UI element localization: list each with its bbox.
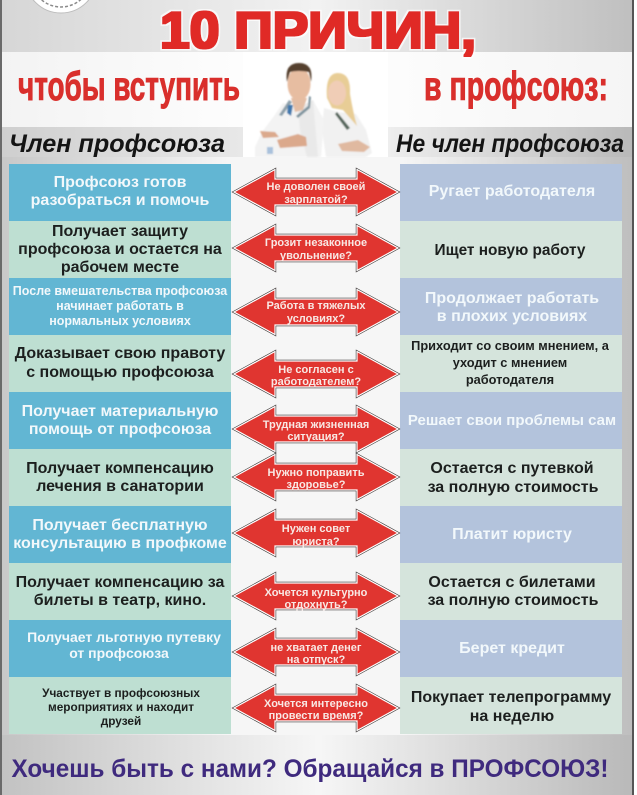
right row 2 bbox=[400, 221, 622, 278]
right row 10: Покупает телепрограмму bbox=[411, 689, 611, 706]
left row 4: Доказывает свою правоту bbox=[15, 345, 225, 362]
arrow 3: Работа в тяжелых bbox=[266, 300, 366, 312]
left row 8 bbox=[9, 563, 231, 620]
left row 1: разобраться и помочь bbox=[31, 192, 210, 209]
arrow 2 bbox=[234, 226, 398, 270]
left row 4 bbox=[9, 335, 231, 392]
left row 10: мероприятиях и находит bbox=[48, 700, 194, 714]
left row 5: помощь от профсоюза bbox=[29, 421, 211, 438]
right row 10: на неделю bbox=[470, 708, 555, 725]
footer call to action: Хочешь быть с нами? Обращайся в ПРОФСОЮЗ! bbox=[12, 755, 608, 783]
arrow 5: ситуация? bbox=[287, 431, 345, 443]
man hands bbox=[260, 131, 279, 138]
arrow 7 bbox=[234, 510, 398, 556]
right row 5: Решает свои проблемы сам bbox=[408, 412, 616, 429]
right row 4: Приходит со своим мнением, а bbox=[411, 338, 610, 353]
arrow 5 bbox=[234, 406, 398, 452]
right row 8: Остается с билетами bbox=[428, 574, 596, 591]
arrow 8: Хочется культурно bbox=[265, 587, 368, 599]
arrow 2: Грозит незаконное bbox=[265, 237, 367, 249]
arrow 3: условиях? bbox=[287, 313, 345, 325]
right row 4 bbox=[400, 335, 622, 392]
arrow 1: зарплатой? bbox=[284, 194, 348, 206]
left row 3: нормальных условиях bbox=[49, 314, 191, 328]
left row 8: билеты в театр, кино. bbox=[34, 592, 206, 609]
logo fragment bbox=[25, 0, 97, 13]
arrow 2: увольнение? bbox=[280, 250, 352, 262]
right row 6: за полную стоимость bbox=[428, 479, 599, 496]
left row 3: После вмешательства профсоюза bbox=[13, 284, 228, 298]
right row 10 bbox=[400, 677, 622, 734]
arrow 4 bbox=[234, 352, 398, 396]
arrow 6 bbox=[234, 454, 398, 500]
left row 6: Получает компенсацию bbox=[26, 460, 214, 477]
right row 7: Платит юристу bbox=[452, 526, 572, 543]
right row 6: Остается с путевкой bbox=[430, 460, 594, 477]
arrow 5: Трудная жизненная bbox=[263, 419, 369, 431]
woman hair and face bbox=[327, 73, 357, 126]
right row 9 bbox=[400, 620, 622, 677]
arrow 1 bbox=[234, 170, 398, 214]
man head bbox=[288, 68, 310, 100]
arrow 6: Нужно поправить bbox=[268, 467, 365, 479]
right row 4: работодателя bbox=[466, 372, 554, 387]
left column: member bbox=[9, 164, 231, 734]
woman coat bbox=[322, 108, 372, 157]
photo: two doctors bbox=[243, 52, 388, 157]
left row 8: Получает компенсацию за bbox=[16, 574, 224, 591]
left row 6 bbox=[9, 449, 231, 506]
left row 4: с помощью профсоюза bbox=[26, 364, 214, 381]
arrow 8: отдохнуть? bbox=[284, 599, 348, 611]
arrow 6: здоровье? bbox=[287, 479, 346, 491]
left row 6: лечения в санатории bbox=[36, 478, 204, 495]
arrow 10 bbox=[234, 686, 398, 730]
right row 7 bbox=[400, 506, 622, 563]
right row 5 bbox=[400, 392, 622, 449]
right row 9: Берет кредит bbox=[459, 640, 565, 657]
left row 1: Профсоюз готов bbox=[54, 174, 187, 191]
left row 2: профсоюза и остается на bbox=[18, 241, 222, 258]
right row 8 bbox=[400, 563, 622, 620]
left row 7: консультацию в профкоме bbox=[13, 535, 227, 552]
left row 10 bbox=[9, 677, 231, 734]
left row 3: начинает работать в bbox=[56, 299, 184, 313]
right row 3: в плохих условиях bbox=[437, 308, 587, 325]
left row 3 bbox=[9, 278, 231, 335]
right row 8: за полную стоимость bbox=[428, 592, 599, 609]
left row 2: рабочем месте bbox=[61, 259, 179, 276]
left row 5: Получает материальную bbox=[22, 403, 219, 420]
column header strips bbox=[2, 127, 632, 157]
arrow 7: Нужен совет bbox=[282, 523, 351, 535]
man neck, tie and stethoscope bbox=[291, 98, 307, 112]
left row 7: Получает бесплатную bbox=[32, 517, 208, 534]
left row 2 bbox=[9, 221, 231, 278]
arrow 9 bbox=[234, 630, 398, 674]
right row 3: Продолжает работать bbox=[425, 290, 599, 307]
man coat bbox=[255, 100, 324, 157]
right row 1: Ругает работодателя bbox=[429, 183, 595, 200]
left row 7 bbox=[9, 506, 231, 563]
left row 9: от профсоюза bbox=[69, 645, 169, 661]
left row 5 bbox=[9, 392, 231, 449]
left row 1 bbox=[9, 164, 231, 221]
right row 1 bbox=[400, 164, 622, 221]
left row 10: Участвует в профсоюзных bbox=[42, 686, 200, 700]
arrow 3 bbox=[234, 290, 398, 334]
arrow 7: юриста? bbox=[292, 536, 340, 548]
right column: non-member bbox=[400, 164, 622, 734]
left row 10: друзей bbox=[101, 714, 141, 728]
arrow 10: провести время? bbox=[269, 710, 364, 722]
arrow 8 bbox=[234, 574, 398, 618]
right row 6 bbox=[400, 449, 622, 506]
left row 9: Получает льготную путевку bbox=[27, 629, 221, 645]
subtitle left: чтобы вступить bbox=[18, 63, 240, 109]
arrow 4: работодателем? bbox=[271, 376, 361, 388]
arrow 4: Не согласен с bbox=[278, 364, 354, 376]
right row 3 bbox=[400, 278, 622, 335]
arrow 10: Хочется интересно bbox=[264, 698, 368, 710]
left row 2: Получает защиту bbox=[52, 223, 188, 240]
arrow 9: не хватает денег bbox=[270, 642, 362, 654]
right row 4: уходит с мнением bbox=[453, 355, 567, 370]
column heading: member: Член профсоюза bbox=[9, 130, 225, 158]
left row 9 bbox=[9, 620, 231, 677]
title: 10 ПРИЧИН, bbox=[160, 2, 476, 60]
arrow 1: Не доволен своей bbox=[267, 181, 365, 193]
center arrows bbox=[234, 170, 398, 730]
arrow 9: на отпуск? bbox=[287, 654, 346, 666]
right row 2: Ищет новую работу bbox=[435, 242, 586, 259]
